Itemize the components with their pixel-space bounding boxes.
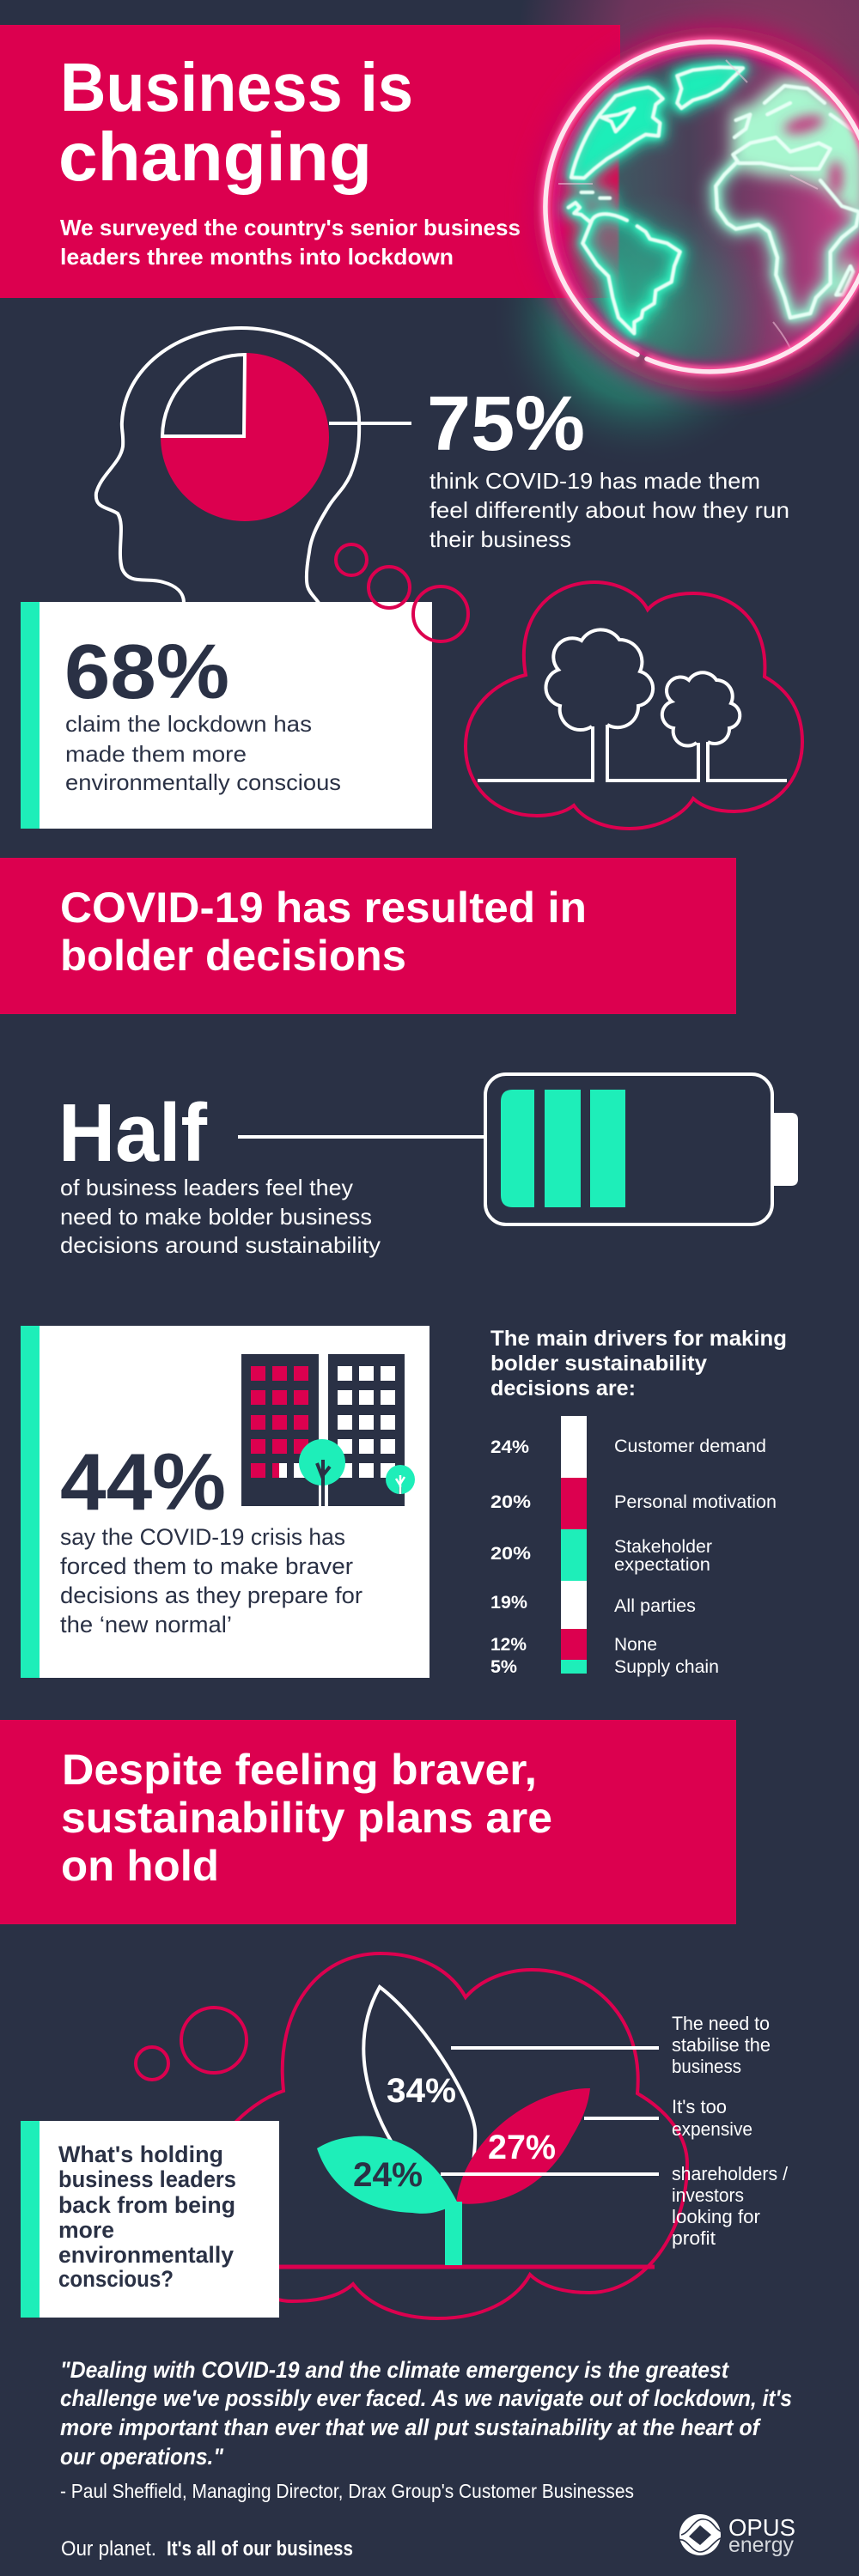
footer tagline [61, 2537, 353, 2561]
stat: 75%: their business [430, 526, 571, 552]
quote: more important than ever that we all put sustainability at the heart of [60, 2415, 762, 2440]
heading: main drivers: bolder sustainability [490, 1352, 707, 1376]
connector line: 75% [329, 422, 411, 425]
icon: office buildings and trees [241, 1354, 415, 1506]
title: Business is [60, 49, 413, 125]
plant: crimson leaf [456, 2088, 590, 2204]
subtitle: We surveyed the country's senior business [60, 215, 521, 240]
leader lines [441, 2046, 659, 2176]
leaf labels [672, 2013, 789, 2249]
stat: half: need to make bolder business [60, 1204, 372, 1230]
panel: 44% card: decisions as they prepare for [60, 1583, 362, 1608]
stat: half: decisions around sustainability [60, 1232, 381, 1258]
header banner [0, 25, 620, 298]
footer tagline: It's all of our business [167, 2537, 353, 2561]
section banner: plans on hold: on hold [61, 1842, 219, 1890]
panel: 68% card: claim the lockdown has [65, 711, 312, 737]
heading: main drivers [490, 1327, 787, 1400]
panel: 68% card [21, 602, 432, 829]
chart labels: percentages: 12% [490, 1635, 527, 1655]
plant: white leaf [363, 1987, 475, 2164]
logo: Opus Energy: energy [728, 2533, 794, 2557]
icon: cloud with trees [466, 582, 802, 829]
quote: challenge we've possibly ever faced. As we navigate out of lockdown, it's [60, 2385, 792, 2411]
panel: 44% card: the ‘new normal’ [60, 1612, 232, 1637]
stat: half: Half [58, 1087, 208, 1179]
chart labels: drivers: None [614, 1635, 657, 1655]
chart labels: drivers [614, 1437, 777, 1677]
subtitle: leaders three months into lockdown [60, 244, 454, 270]
plum glow behind globe [515, 0, 859, 326]
panel: question card: business leaders [58, 2166, 236, 2192]
connector line: half [238, 1135, 485, 1139]
leaf labels: looking for [672, 2206, 760, 2227]
chart labels: percentages: 24% [490, 1437, 529, 1457]
pie chart: 75% [161, 353, 329, 521]
quote attribution: - Paul Sheffield, Managing Director, Drax Group's Customer Businesses [60, 2480, 634, 2502]
panel: question card: back from being [58, 2192, 235, 2218]
chart labels: percentages [490, 1437, 531, 1677]
section banner: plans on hold: sustainability plans are [61, 1794, 552, 1842]
icon: head outline [96, 328, 359, 603]
chart labels: drivers: All parties [614, 1596, 696, 1616]
icon: battery half full [485, 1074, 798, 1224]
leaf percentages: 27% [488, 2129, 556, 2166]
leaf labels: profit [672, 2227, 716, 2249]
panel: 68% card: environmentally conscious [65, 769, 341, 795]
section banner: bolder decisions: bolder decisions [60, 932, 406, 980]
green glow behind globe [481, 172, 859, 464]
leaf labels: business [672, 2056, 741, 2077]
stat: 75%: feel differently about how they run [430, 497, 789, 523]
stat: 75% [427, 381, 789, 552]
panel: 44% card: say the COVID-19 crisis has [60, 1524, 345, 1550]
panel: 68% card: 68% [64, 629, 229, 715]
leaf labels: expensive [672, 2118, 752, 2140]
stat: half: of business leaders feel they [60, 1175, 353, 1200]
chart labels: percentages: 20% [490, 1492, 531, 1512]
icon: neon globe [544, 38, 859, 381]
panel: question card: environmentally [58, 2242, 234, 2268]
section banner: bolder decisions [0, 858, 736, 1014]
stacked bar chart: drivers [561, 1416, 587, 1674]
chart labels: percentages: 5% [490, 1657, 517, 1677]
leaf labels: shareholders / [672, 2163, 789, 2184]
panel: question card [21, 2121, 279, 2318]
panel: 44% card: 44% [60, 1437, 226, 1527]
subtitle [60, 215, 521, 270]
leaf labels: investors [672, 2184, 744, 2206]
thought bubbles [336, 544, 468, 641]
heading: main drivers: decisions are: [490, 1376, 636, 1400]
panel: 68% card: made them more [65, 741, 247, 767]
quote: "Dealing with COVID-19 and the climate emergency is the greatest [60, 2357, 729, 2383]
section banner: bolder decisions: COVID-19 has resulted in [60, 884, 587, 932]
panel: 44% card [21, 1326, 430, 1678]
section banner: plans on hold [0, 1720, 736, 1924]
leaf labels: stabilise the [672, 2034, 771, 2056]
heading: main drivers: The main drivers for making [490, 1327, 787, 1351]
leaf labels: It's too [672, 2096, 727, 2117]
chart labels: drivers: Personal motivation [614, 1492, 777, 1512]
footer tagline: Our planet. [61, 2537, 156, 2561]
chart labels: percentages: 19% [490, 1593, 527, 1613]
icon: thought cloud and ground [136, 1953, 687, 2318]
stat: 75%: 75% [427, 381, 585, 467]
leaf percentages: 24% [353, 2156, 423, 2194]
leaf labels: The need to [672, 2013, 770, 2034]
plant: teal leaf and stem [317, 2136, 462, 2265]
panel: 44% card: forced them to make braver [60, 1553, 353, 1579]
title [58, 49, 413, 195]
panel: question card: more [58, 2217, 114, 2243]
stat: 75%: think COVID-19 has made them [430, 468, 760, 494]
title: changing [58, 118, 372, 195]
stat: half [58, 1087, 381, 1258]
chart labels: percentages: 20% [490, 1544, 531, 1564]
chart labels: drivers: expectation [614, 1555, 710, 1575]
chart labels: drivers: Stakeholder [614, 1537, 712, 1557]
leaf percentages: 34% [387, 2072, 456, 2110]
logo: Opus Energy [679, 2514, 795, 2557]
leaf percentages [353, 2072, 556, 2194]
chart labels: drivers: Customer demand [614, 1437, 766, 1456]
logo: Opus Energy: OPUS [728, 2514, 795, 2541]
section banner: plans on hold: Despite feeling braver, [62, 1746, 537, 1794]
quote [60, 2357, 792, 2470]
quote: our operations." [60, 2444, 224, 2470]
chart labels: drivers: Supply chain [614, 1657, 719, 1677]
panel: question card: What's holding [58, 2142, 223, 2167]
panel: question card: conscious? [58, 2266, 174, 2292]
